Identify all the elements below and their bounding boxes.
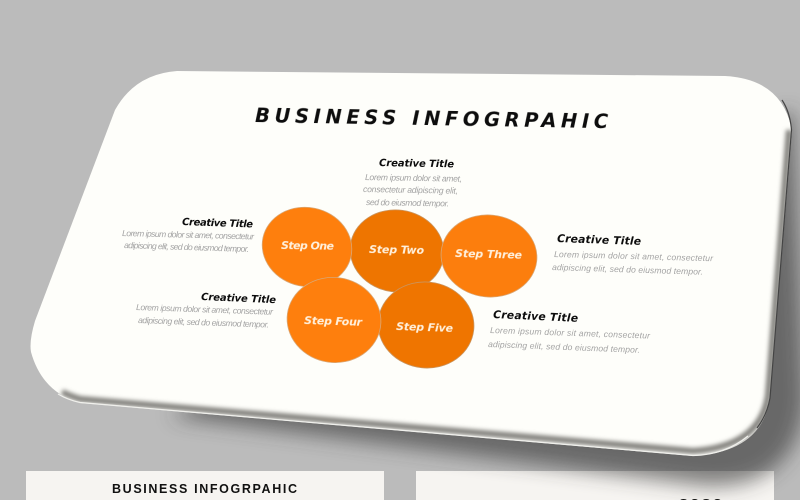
circle: step four	[282, 271, 386, 369]
text block: right lower: adipiscing elit, sed do eiusmod tempor.	[488, 339, 640, 355]
panel: lower right slide preview	[416, 471, 774, 500]
card bevel shading	[62, 130, 789, 451]
card face	[30, 71, 792, 456]
text block: top: consectetur adipiscing elit,	[363, 184, 458, 196]
text block: left upper: Lorem ipsum dolor sit amet, consectetur	[122, 228, 255, 241]
text block: top: Creative Title	[379, 158, 454, 170]
label: step three: Step Three	[455, 247, 523, 262]
text block: right upper: Creative Title	[557, 232, 641, 248]
text block: left upper: Creative Title	[182, 217, 253, 230]
card right edge line	[757, 100, 792, 428]
text block: top: Lorem ipsum dolor sit amet,	[365, 172, 462, 184]
text block: left lower: adipiscing elit, sed do eiusmod tempor.	[138, 315, 269, 330]
text block: right lower: Creative Title	[493, 308, 578, 325]
text block: top: sed do eiusmod tempor.	[366, 197, 449, 208]
circle: step two	[345, 204, 449, 298]
text block: left lower	[136, 292, 276, 330]
circle: step five	[374, 277, 478, 373]
text block: left upper: adipiscing elit, sed do eiusmod tempor.	[124, 240, 249, 254]
title: BUSINESS INFOGRPAHIC	[255, 104, 609, 133]
panel: tilted slide card	[30, 71, 792, 456]
label: step two: Step Two	[369, 243, 425, 257]
panel: lower left slide preview	[26, 471, 384, 500]
text block: left lower: Creative Title	[201, 292, 276, 306]
text block: right upper: adipiscing elit, sed do eiusmod tempor.	[552, 262, 703, 277]
label: step five: Step Five	[396, 320, 454, 335]
step circles	[255, 199, 541, 373]
circle: step three	[437, 210, 541, 302]
text block: left lower: Lorem ipsum dolor sit amet, consectetur	[136, 302, 274, 317]
text block: left upper	[122, 217, 255, 254]
text block: top	[363, 158, 462, 208]
text block: right lower: Lorem ipsum dolor sit amet, consectetur	[490, 325, 651, 341]
label: step four: Step Four	[304, 314, 363, 329]
text block: right upper: Lorem ipsum dolor sit amet, consectetur	[554, 249, 714, 263]
text block: right lower	[488, 308, 651, 355]
label: step one: Step One	[281, 239, 335, 253]
card lip highlight	[58, 394, 748, 456]
text block: right upper	[552, 232, 714, 277]
card shadow	[170, 110, 800, 486]
circle: step one	[255, 199, 359, 295]
lower left heading: BUSINESS INFOGRPAHIC	[112, 482, 297, 496]
